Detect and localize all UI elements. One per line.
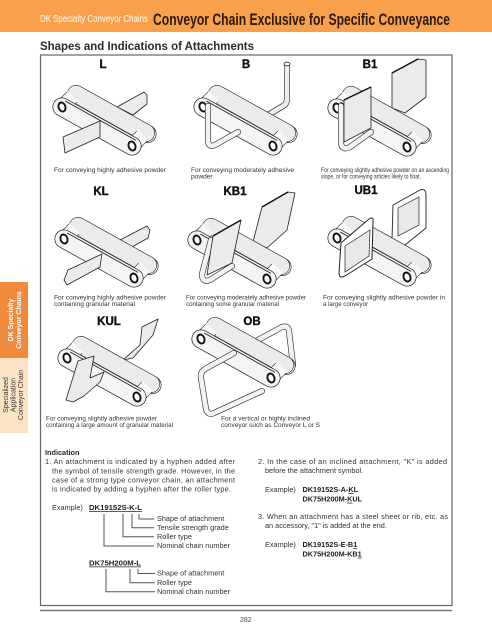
attachment L: L: [99, 59, 107, 71]
side tab: DK Specialty Conveyor Chains: Conveyor Chains: [16, 291, 23, 349]
attachment B1: B1: [363, 59, 378, 71]
attachment UB1: For conveying slightly adhesive powder in: [323, 294, 445, 302]
note 1 text: is indicated by adding a hyphen after the roller type.: [52, 484, 231, 494]
side tab: Specialized Application Conveyor Chain: Specialized: [3, 377, 10, 413]
indication heading: Indication: [45, 448, 79, 457]
page number: 282: [240, 617, 252, 624]
attachment KUL: For conveying slightly adhesive powder: [46, 416, 158, 423]
attachment B1: [321, 59, 449, 180]
attachment KB1: containing some granular material: [186, 301, 279, 308]
attachment KL: KL: [93, 186, 109, 198]
attachment OB: For a vertical or highly inclined: [221, 416, 310, 423]
note 1 text: the symbol of tensile strength grade. However, in the: [52, 466, 235, 476]
example diagram: DK19152S-K-L: Tensile strength grade: [157, 523, 229, 532]
note 2: DK19152S-A-KL: [302, 485, 359, 494]
note 2: [258, 457, 447, 504]
attachment KL: containing granular material: [54, 301, 136, 308]
side tab: Specialized Application Conveyor Chain: Conveyor Chain: [18, 370, 25, 420]
attachment OB: OB: [243, 316, 261, 328]
attachment B: B: [242, 59, 250, 71]
attachment KB1: For conveying moderately adhesive powder: [186, 294, 307, 302]
attachment B1: For conveying slightly adhesive powder on an ascending: [321, 167, 449, 174]
note 1 text: case of a strong type conveyor chain, an attachment: [52, 476, 235, 484]
example diagram: DK19152S-K-L: Shape of attachment: [157, 514, 224, 523]
attachment UB1: UB1: [354, 185, 378, 197]
note 3: 3. When an attachment has a steel sheet or rib, etc. as: [258, 512, 448, 521]
attachment OB: [196, 316, 321, 429]
note 2: DK75H200M-KUL: [302, 495, 363, 504]
note 3: DK19152S-E-B1: [302, 540, 357, 549]
side tab: Specialized Application Conveyor Chain: [0, 358, 28, 433]
side tab: DK Specialty Conveyor Chains: [0, 282, 28, 358]
example diagram: DK19152S-K-L: Nominal chain number: [157, 541, 231, 550]
note 1 text: [45, 457, 236, 494]
example diagram: DK75H200M-L: [89, 558, 231, 596]
example diagram: DK19152S-K-L: Roller type: [157, 532, 192, 541]
example diagram: DK19152S-K-L: DK19152S-K-L: [89, 503, 143, 512]
attachment KUL: KUL: [97, 316, 121, 328]
attachment L: For conveying highly adhesive powder: [54, 167, 167, 174]
attachment B: powder: [191, 174, 213, 180]
note 2: 2. In the case of an inclined attachment, "K" is added: [258, 457, 447, 466]
section heading: Shapes and Indications of Attachments: [40, 41, 254, 53]
example diagram: DK75H200M-L: DK75H200M-L: [89, 558, 142, 568]
attachment KL: [54, 186, 167, 308]
note 3: DK75H200M-KB1: [302, 550, 362, 559]
attachment B: For conveying moderately adhesive: [191, 167, 294, 174]
attachment KB1: [186, 186, 307, 308]
note 2: Example): [265, 485, 296, 494]
attachment UB1: [323, 185, 445, 308]
side tab: Specialized Application Conveyor Chain: Application: [10, 378, 18, 412]
attachment UB1: a large conveyor: [323, 301, 369, 308]
footer rule: [40, 610, 452, 612]
header category label: DK Specialty Conveyor Chains: [40, 14, 148, 25]
example diagram: DK19152S-K-L: Example): [52, 503, 83, 512]
side tab: DK Specialty Conveyor Chains: DK Specialty: [8, 298, 15, 341]
note 2: before the attachment symbol.: [265, 466, 363, 475]
attachment B1: slope, or for conveying articles likely to float.: [321, 174, 421, 180]
attachment B: [191, 59, 294, 180]
note 3: Example): [265, 540, 296, 549]
header band: [0, 0, 492, 32]
attachment KUL: [46, 316, 173, 429]
example diagram: DK75H200M-L: Roller type: [157, 578, 192, 587]
attachment KL: For conveying highly adhesive powder: [54, 294, 167, 302]
note 3: an accessory, "1" is added at the end.: [265, 521, 387, 530]
note 3: [258, 512, 448, 559]
attachment KB1: KB1: [223, 186, 247, 198]
attachment OB: conveyor such as Conveyor L or S: [221, 422, 321, 429]
attachment L: [54, 59, 167, 174]
example diagram: DK75H200M-L: Shape of attachment: [157, 568, 224, 578]
example diagram: DK19152S-K-L: [52, 503, 231, 550]
example diagram: DK75H200M-L: Nominal chain number: [157, 587, 231, 596]
attachment KUL: containing a large amount of granular material: [46, 422, 173, 429]
note 1 text: 1. An attachment is indicated by a hyphen added after: [45, 457, 236, 466]
main frame: [40, 55, 452, 606]
